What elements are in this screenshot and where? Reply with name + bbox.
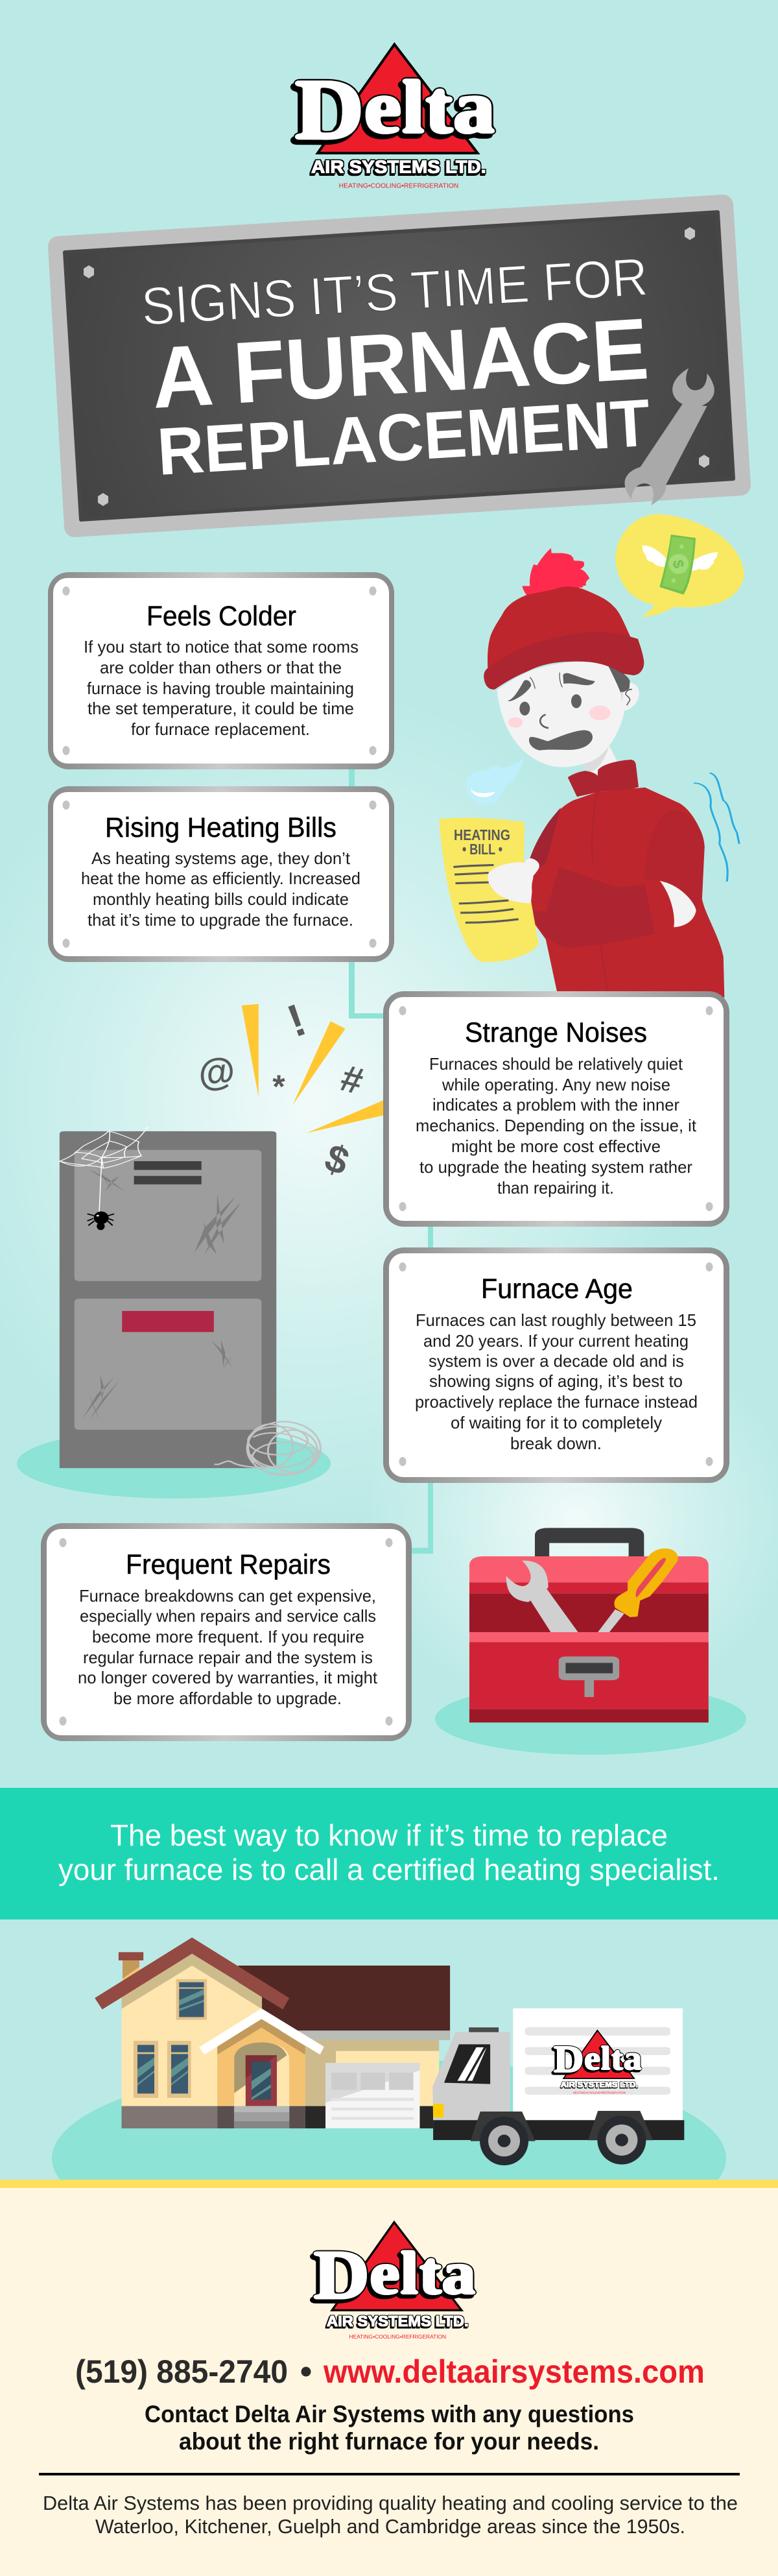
logo: Delta Air Systems footer: elta — [370, 2239, 476, 2307]
illustration: toolbox — [435, 1528, 746, 1755]
body text: mechanics. Depending on the issue, it — [416, 1116, 697, 1135]
windows — [134, 1979, 207, 2098]
toolbox floor ellipse — [435, 1683, 746, 1755]
bullet — [301, 2366, 311, 2377]
body text: and 20 years. If your current heating — [423, 1331, 689, 1351]
body text: If you start to notice that some rooms — [84, 637, 359, 656]
heading: Feels Colder — [147, 601, 296, 632]
logo: Delta Air Systems footer: AIR SYSTEMS LTD. — [327, 2313, 469, 2329]
body text: than repairing it. — [497, 1178, 614, 1198]
body text — [84, 637, 359, 739]
body text: to upgrade the heating system rather — [419, 1157, 692, 1177]
porch — [199, 2008, 324, 2128]
body text: Furnace breakdowns can get expensive, — [79, 1586, 376, 1606]
noise symbols: # — [336, 1057, 368, 1103]
body text: monthly heating bills could indicate — [93, 889, 349, 909]
company description — [43, 2492, 738, 2538]
body text: be more affordable to upgrade. — [113, 1689, 342, 1708]
body text: become more frequent. If you require — [92, 1627, 364, 1646]
company description: Delta Air Systems has been providing quality heating and cooling service to the — [43, 2492, 738, 2514]
truck wheels — [480, 2115, 646, 2165]
logo: Delta Air Systems top — [294, 44, 495, 190]
heating bill: HEATING — [454, 826, 510, 843]
body text: the set temperature, it could be time — [88, 699, 354, 718]
panel: Feels Colder — [48, 572, 394, 769]
body text: system is over a decade old and is — [429, 1351, 684, 1371]
contact text — [145, 2401, 634, 2455]
body text — [78, 1586, 378, 1708]
mitten and sleeve — [488, 858, 696, 934]
body text: especially when repairs and service calls — [80, 1606, 376, 1626]
jacket — [527, 788, 724, 997]
spider — [88, 1211, 114, 1230]
panel: Frequent Repairs — [41, 1523, 412, 1741]
illustration: house — [95, 1938, 450, 2128]
panel: Strange Noises — [383, 991, 729, 1227]
body text: no longer covered by warranties, it might — [78, 1668, 378, 1687]
main house wall — [121, 1966, 262, 2106]
illustration: furnace — [17, 994, 398, 1499]
body text: that it’s time to upgrade the furnace. — [88, 910, 353, 930]
main roof — [95, 1938, 289, 2010]
heading: Furnace Age — [481, 1273, 633, 1305]
truck logo — [553, 2030, 642, 2095]
icon: speech bubble with flying money — [615, 514, 744, 618]
screwdriver — [598, 1548, 678, 1632]
scratches — [82, 1167, 242, 1421]
noise symbols: @ — [196, 1049, 237, 1095]
logo triangle — [318, 44, 478, 153]
sign bolts — [84, 227, 709, 506]
panel: Furnace Age — [383, 1247, 729, 1483]
logo wordmark: D — [294, 61, 364, 158]
truck chassis — [433, 2120, 684, 2140]
icon: speech bubble with flying money: $ — [670, 559, 688, 570]
logo: Delta Air Systems footer: D — [313, 2236, 370, 2314]
logo: Delta Air Systems footer — [313, 2222, 476, 2340]
body text: for furnace replacement. — [131, 719, 310, 739]
body text: regular furnace repair and the system is — [83, 1648, 373, 1667]
shiver lines — [694, 773, 739, 882]
icon: wrench — [625, 368, 714, 505]
body text: proactively replace the furnace instead — [415, 1392, 698, 1412]
body text — [415, 1310, 698, 1453]
body text: of waiting for it to completely — [451, 1413, 662, 1432]
truck logo: AIR SYSTEMS LTD. — [561, 2080, 638, 2089]
body text: might be more cost effective — [451, 1137, 661, 1156]
garage — [238, 1966, 450, 2128]
noise symbols: ! — [281, 994, 312, 1047]
title line 1: SIGNS IT’S TIME FOR — [140, 247, 650, 337]
body text: break down. — [510, 1434, 602, 1453]
cold breath — [466, 758, 524, 805]
logo tagline: HEATING•COOLING•REFRIGERATION — [339, 183, 458, 190]
latch — [559, 1657, 619, 1697]
body text — [81, 849, 360, 930]
panel: Rising Heating Bills — [48, 786, 394, 962]
panel: title sign — [58, 205, 740, 527]
truck box — [513, 2008, 683, 2120]
banner text: The best way to know if it’s time to replace — [110, 1818, 668, 1852]
body text: showing signs of aging, it’s best to — [429, 1371, 683, 1391]
noise symbols: $ — [320, 1135, 355, 1184]
company description: Waterloo, Kitchener, Guelph and Cambridge areas since the 1950s. — [95, 2515, 685, 2538]
truck logo: D — [553, 2038, 584, 2080]
title line 2: A FURNACE — [149, 300, 651, 427]
furnace cabinet — [60, 1131, 276, 1468]
body text: indicates a problem with the inner — [432, 1095, 679, 1114]
chimney — [119, 1952, 143, 1980]
truck logo: elta — [584, 2040, 642, 2076]
title line 3: REPLACEMENT — [155, 385, 652, 489]
heading: Frequent Repairs — [126, 1549, 331, 1580]
body text: are colder than others or that the — [100, 658, 342, 677]
yellow divider — [0, 2180, 778, 2188]
heading: Strange Noises — [465, 1017, 647, 1048]
floor ellipse — [17, 1428, 331, 1499]
logo wordmark: elta — [364, 65, 495, 149]
toolbox body — [469, 1556, 709, 1582]
noise burst lines — [242, 1004, 398, 1133]
wrench in toolbox — [506, 1561, 578, 1632]
cobweb — [60, 1127, 148, 1212]
panel: footer — [0, 2188, 778, 2576]
heading: Rising Heating Bills — [105, 812, 336, 843]
sign frame — [58, 205, 740, 527]
body text: while operating. Any new noise — [442, 1075, 670, 1094]
heating bill: • BILL • — [462, 841, 502, 858]
phone number: (519) 885-2740 — [75, 2353, 288, 2390]
illustration: service truck — [432, 2008, 684, 2165]
banner — [0, 1788, 778, 1920]
noise symbols — [196, 994, 368, 1184]
truck logo: HEATING•COOLING•REFRIGERATION — [573, 2091, 626, 2095]
body text — [416, 1054, 697, 1198]
dust ball — [215, 1422, 320, 1475]
body text: Furnaces should be relatively quiet — [429, 1054, 683, 1074]
logo subtitle: AIR SYSTEMS LTD. — [311, 157, 486, 177]
website: www.deltaairsystems.com — [323, 2353, 705, 2390]
noise symbols: * — [272, 1068, 285, 1105]
body text: heat the home as efficiently. Increased — [81, 869, 360, 888]
logo: Delta Air Systems footer: HEATING•COOLING•REFRIGERATION — [349, 2334, 446, 2340]
body text: furnace is having trouble maintaining — [87, 679, 354, 698]
body text: As heating systems age, they don’t — [91, 849, 351, 868]
illustration: cold man holding heating bill — [439, 548, 739, 997]
truck cab — [432, 2032, 510, 2120]
contact text: Contact Delta Air Systems with any questions — [145, 2401, 634, 2427]
banner: your furnace is to call a certified heating specialist. — [58, 1853, 720, 1886]
contact text: about the right furnace for your needs. — [179, 2428, 599, 2455]
heating bill — [439, 818, 538, 962]
sign face — [65, 212, 733, 520]
ground mound — [52, 2060, 726, 2257]
toolbox handle — [535, 1528, 644, 1559]
body text: Furnaces can last roughly between 15 — [416, 1310, 696, 1330]
head and hat — [484, 548, 644, 797]
